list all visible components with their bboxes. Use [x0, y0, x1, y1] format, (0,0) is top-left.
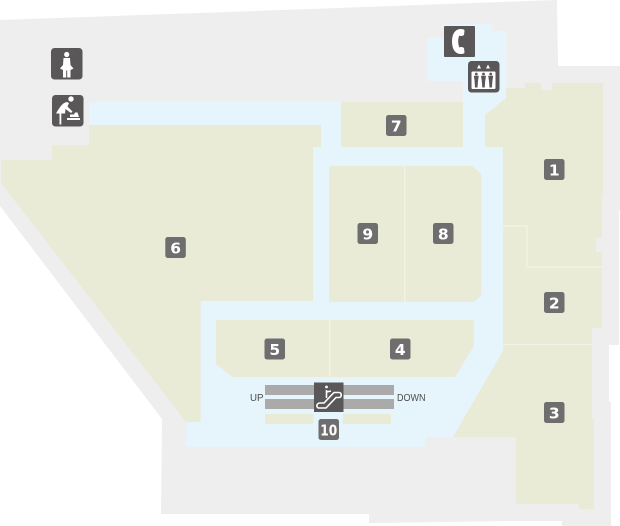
badge 3	[544, 402, 564, 423]
badge 2: 2	[549, 294, 560, 312]
icon: elevator	[468, 61, 500, 92]
badge 1: 1	[549, 161, 560, 179]
badge 8: 8	[438, 225, 449, 243]
shop area 6	[1, 125, 321, 422]
badge 8	[433, 223, 454, 244]
badge 6: 6	[170, 239, 181, 257]
badge 5: 5	[269, 341, 280, 359]
escalator steps	[265, 385, 394, 424]
label: DOWN: DOWN	[397, 393, 426, 404]
badge 7: 7	[391, 117, 402, 135]
icon: escalator	[314, 382, 344, 412]
icon: restroom	[51, 48, 82, 80]
badge 3: 3	[549, 404, 560, 422]
badge 9	[358, 223, 378, 244]
badge 1	[544, 159, 564, 180]
badge 4	[390, 338, 410, 360]
walkway corridors	[89, 24, 506, 447]
badge 7	[386, 115, 406, 136]
shop areas 4 and 5	[216, 320, 474, 377]
label: UP: UP	[250, 393, 264, 404]
badge 9: 9	[362, 225, 373, 243]
badge 10	[318, 419, 339, 440]
badge 5	[264, 338, 285, 360]
badge 10: 10	[320, 421, 337, 439]
badge 4: 4	[395, 341, 406, 359]
shop areas 8 and 9	[329, 166, 482, 302]
shop areas 1, 2 and 3	[453, 83, 603, 509]
icon: baby changing	[52, 95, 84, 126]
badge 6	[165, 237, 186, 258]
badge 2	[544, 292, 564, 313]
icon: telephone	[444, 26, 475, 57]
shop area 7	[341, 102, 463, 147]
